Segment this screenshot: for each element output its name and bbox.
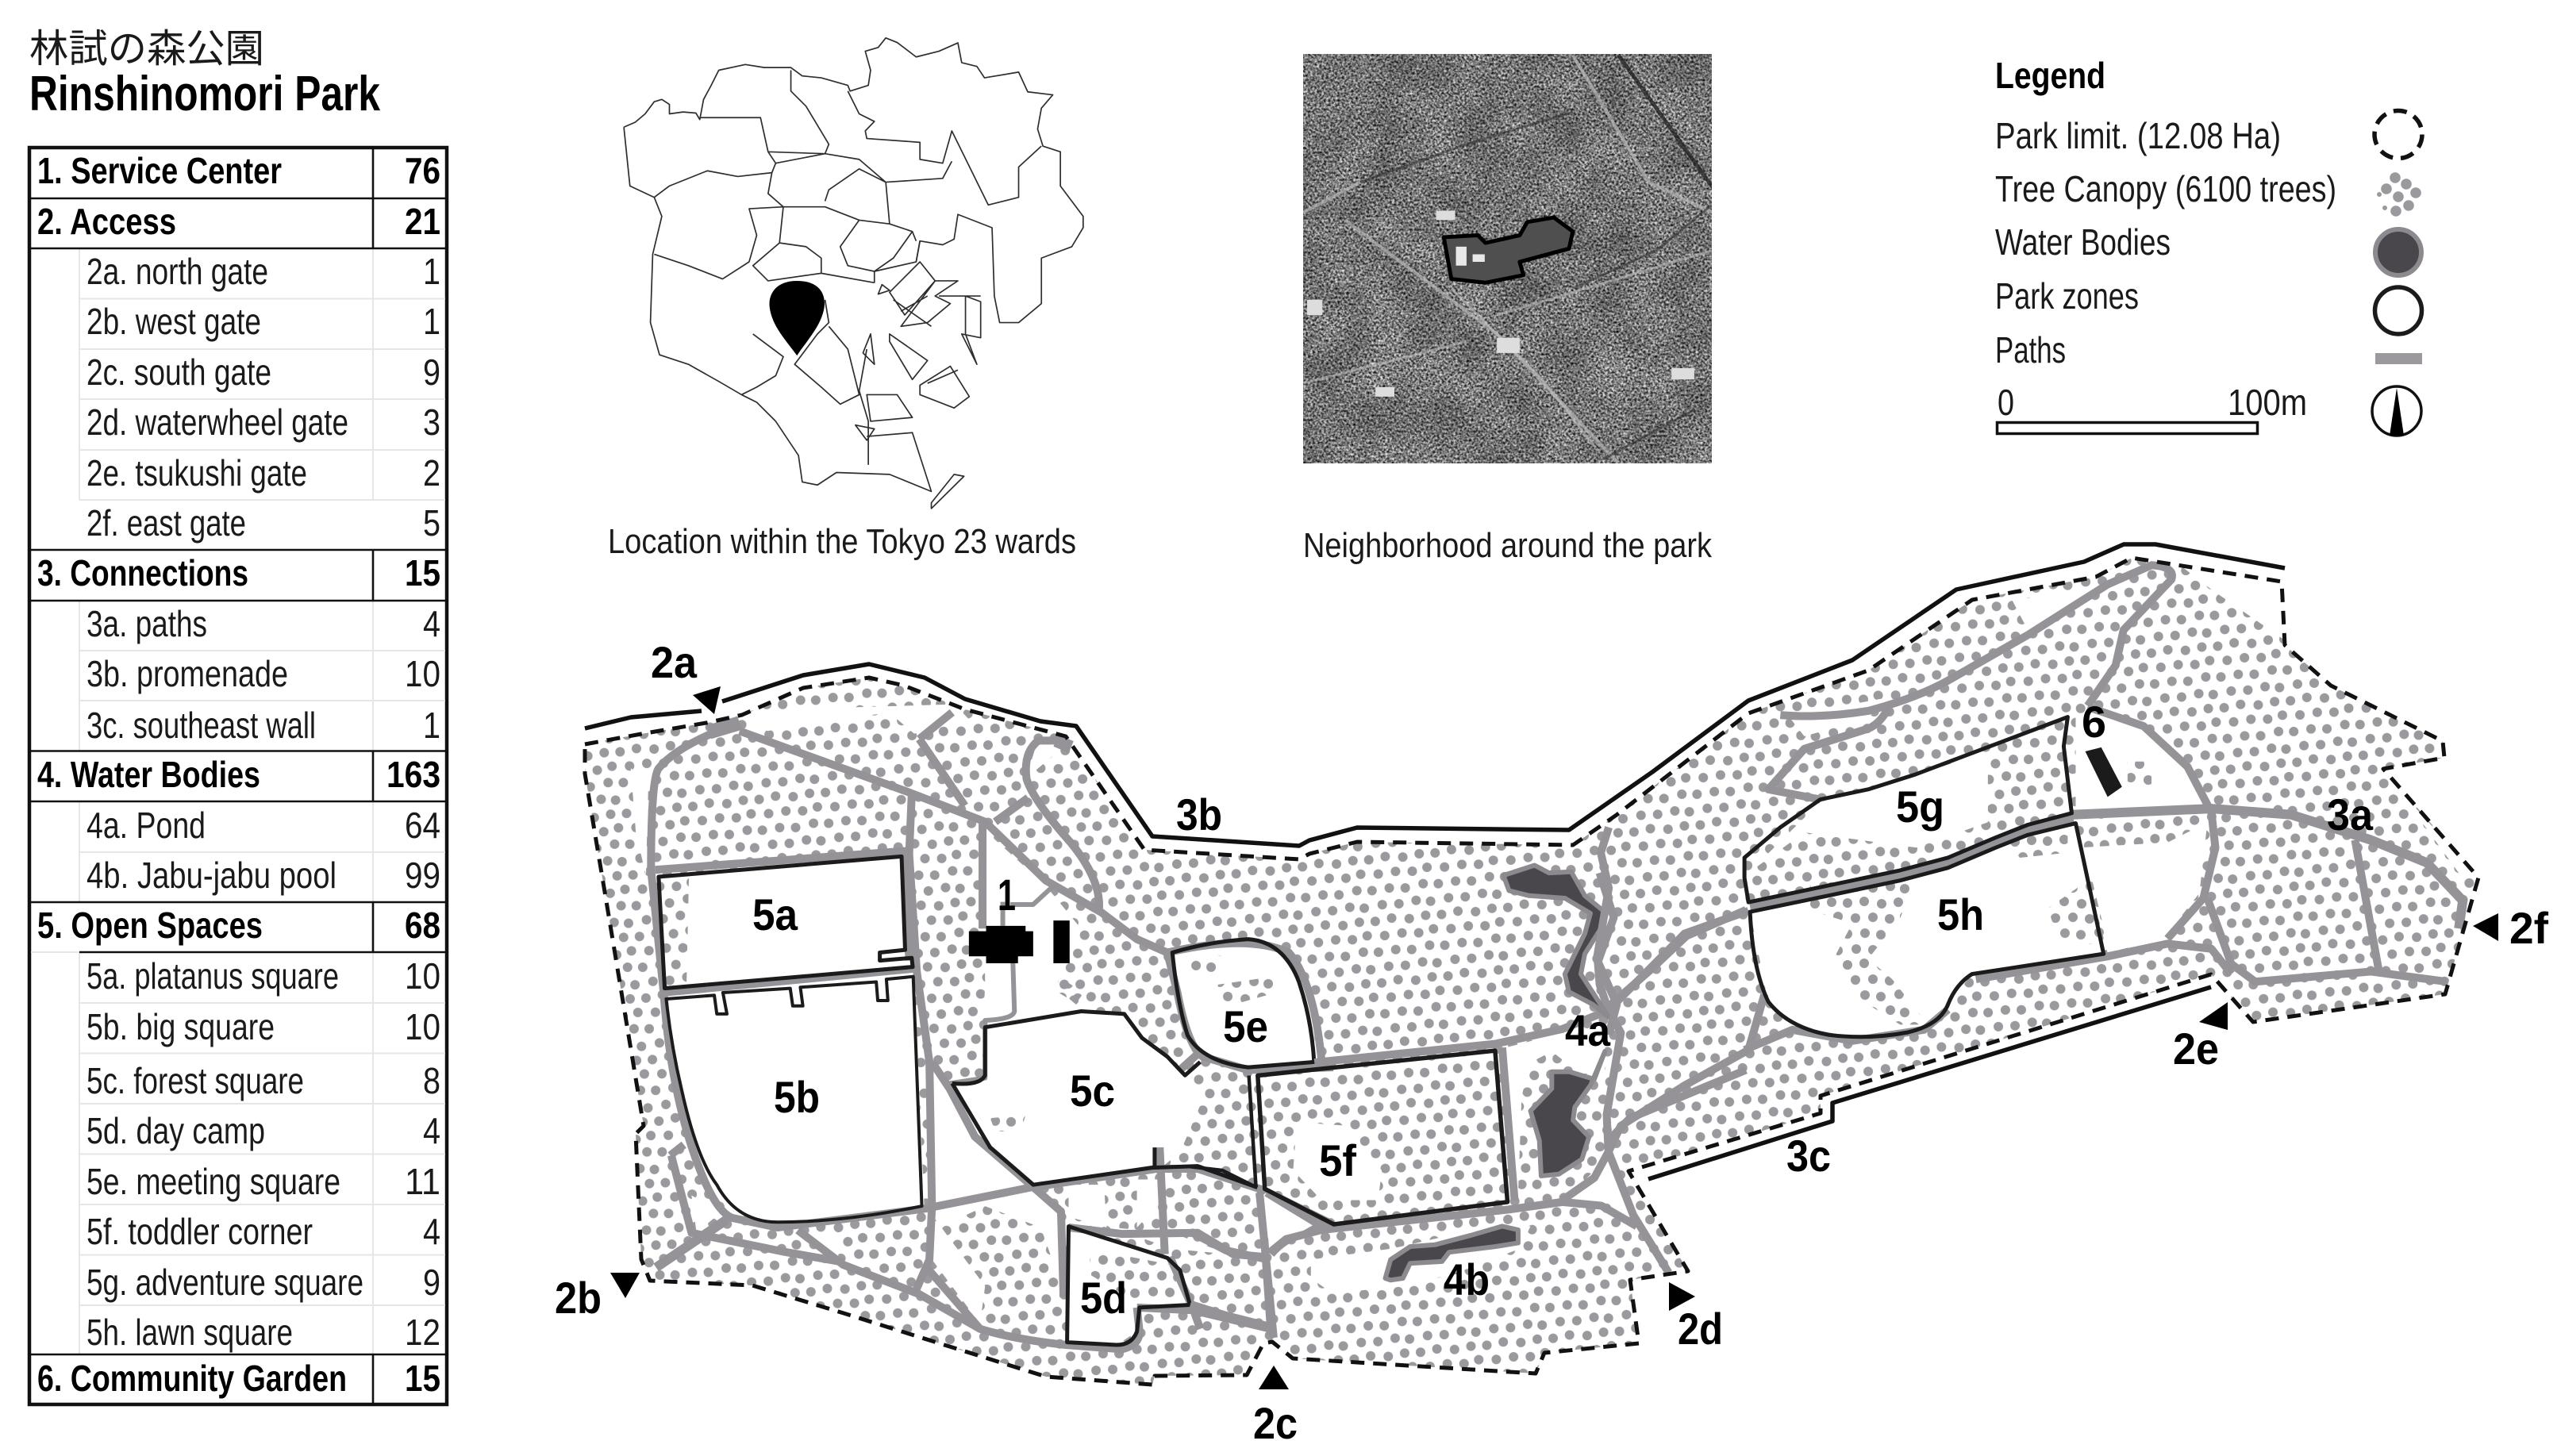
icon: service center buildings (969, 920, 1070, 963)
clearings east (1748, 562, 2478, 1037)
rows: open space types: 5d. day camp (87, 1110, 265, 1151)
row: community garden: 6. Community Garden (37, 1358, 347, 1399)
caption: neighborhood: Neighborhood around the park (1303, 526, 1713, 565)
central sector (1190, 873, 1746, 1338)
title: Japanese name: 林試の森公園 (29, 28, 264, 71)
rows: access gates: 2c. south gate (87, 352, 271, 393)
solid boundary southeast wall (1648, 987, 2211, 1179)
park map (555, 544, 2548, 1448)
pool 4b (1386, 1226, 1518, 1280)
tree canopy (585, 558, 2478, 1385)
rows: connection types: 3c. southeast wall (87, 705, 316, 746)
rows: connection types: 10 (405, 653, 440, 694)
marker 2c (1259, 1366, 1289, 1389)
clearings central (1254, 1033, 1633, 1293)
map labels: 4b (1444, 1254, 1490, 1304)
gate markers (610, 686, 2498, 1389)
rows: access gates: 2d. waterwheel gate (87, 401, 348, 443)
row: water bodies: 163 (386, 754, 440, 795)
row: connections: 3. Connections (37, 552, 248, 594)
row: water bodies: 4. Water Bodies (37, 754, 260, 795)
row: water bodies (37, 754, 440, 795)
rows: access gates: 2e. tsukushi gate (87, 452, 307, 494)
rows: connection types: 4 (423, 603, 440, 644)
map labels: 2c (1253, 1398, 1298, 1448)
zone 5f (1258, 1051, 1508, 1224)
rows: access gates: 2b. west gate (87, 301, 261, 342)
map labels: 5b (774, 1072, 820, 1122)
marker 2e (2199, 1002, 2228, 1030)
legend item: paths: Paths (1995, 329, 2066, 371)
rows: open space types: 5g. adventure square (87, 1262, 363, 1303)
scale bar: 100m (2228, 382, 2307, 423)
rows: water body types: 99 (405, 855, 440, 896)
rows: open space types: 5h. lawn square (87, 1312, 293, 1353)
rows: access gates: 5 (423, 502, 440, 544)
park limit dashed (585, 558, 2478, 1385)
scale bar (1997, 382, 2307, 433)
rows: open space types: 10 (405, 1006, 440, 1047)
row: connections (37, 552, 440, 594)
map labels: 4a (1565, 1005, 1611, 1055)
rows: access gates: 2a. north gate (87, 251, 268, 292)
map labels: 3c (1786, 1131, 1831, 1181)
rows: open space types: 11 (405, 1161, 440, 1202)
rows: open space types (87, 955, 440, 1353)
map labels: 2d (1678, 1304, 1723, 1354)
rows: access gates: 3 (423, 401, 440, 443)
map labels: 1 (998, 870, 1016, 920)
rows: connection types: 3b. promenade (87, 653, 288, 694)
rows: connection types: 1 (423, 705, 440, 746)
legend item: park zones: Park zones (1995, 275, 2139, 317)
rows: open space types: 5a. platanus square (87, 955, 339, 997)
row: service center: 76 (405, 150, 440, 191)
map labels (555, 637, 2548, 1448)
map labels: 5a (752, 889, 798, 939)
caption: location: Location within the Tokyo 23 wards (608, 522, 1076, 561)
map labels: 5f (1319, 1135, 1356, 1185)
map labels: 3a (2327, 789, 2374, 839)
row: access (37, 201, 440, 242)
icon: community garden building (2086, 747, 2122, 797)
legend item: park zones (1995, 275, 2422, 334)
legend item: park limit (1995, 111, 2422, 159)
map labels: 2a (651, 637, 698, 687)
marker 2a (693, 686, 721, 714)
rows: open space types: 5e. meeting square (87, 1161, 340, 1202)
paths central (1190, 873, 1746, 1338)
paths west (651, 713, 1333, 1349)
legend heading: Legend (1995, 55, 2105, 96)
row: connections: 15 (405, 552, 440, 594)
clearings west (631, 705, 1317, 1345)
rows: access gates: 1 (423, 301, 440, 342)
map labels: 5e (1223, 1001, 1268, 1051)
park zones east (1744, 717, 2104, 1037)
row: service center: 1. Service Center (37, 150, 282, 191)
map labels: 2e (2173, 1024, 2219, 1074)
park outline on aerial (1444, 217, 1573, 282)
rows: open space types: 4 (423, 1110, 440, 1151)
marker 2f (2473, 913, 2498, 941)
rows: open space types: 4 (423, 1211, 440, 1252)
row: access: 21 (405, 201, 440, 242)
marker 2b (610, 1273, 640, 1298)
scale bar: 0 (1998, 382, 2014, 423)
table: visitor counts by park feature (29, 148, 447, 1404)
rows: connection types: 3a. paths (87, 603, 207, 644)
row: access: 2. Access (37, 201, 176, 242)
legend item: tree canopy: Tree Canopy (6100 trees) (1995, 168, 2336, 209)
rows: open space types: 12 (405, 1312, 440, 1353)
legend item: water bodies (1995, 221, 2421, 275)
rows: access gates: 1 (423, 251, 440, 292)
rows: connection types (87, 603, 440, 746)
map labels: 5d (1080, 1273, 1127, 1323)
zone divider (1190, 1075, 1256, 1187)
map labels: 5h (1937, 889, 1984, 939)
west sector (631, 705, 1333, 1349)
rows: access gates (87, 251, 440, 544)
rows: open space types: 5f. toddler corner (87, 1211, 313, 1252)
rows: access gates: 2f. east gate (87, 502, 246, 544)
row: community garden: 15 (405, 1358, 440, 1399)
rows: water body types (87, 805, 440, 896)
rows: open space types: 9 (423, 1262, 440, 1303)
title: English name: Rinshinomori Park (29, 67, 380, 121)
east sector (1503, 562, 2478, 1151)
legend item: paths (1995, 329, 2422, 371)
legend (1995, 55, 2422, 436)
rows: water body types: 4a. Pond (87, 805, 206, 846)
rows: water body types: 64 (405, 805, 440, 846)
paths east (1597, 565, 2463, 1151)
map labels: 5c (1070, 1066, 1115, 1116)
row: open spaces: 5. Open Spaces (37, 905, 263, 946)
row: open spaces: 68 (405, 905, 440, 946)
icon: location pin (769, 281, 825, 355)
north arrow (2372, 386, 2421, 436)
legend item: water bodies: Water Bodies (1995, 221, 2171, 263)
rows: open space types: 5c. forest square (87, 1060, 304, 1101)
aerial image: neighborhood (1303, 54, 1717, 463)
map labels: 2f (2509, 903, 2548, 953)
title (29, 28, 380, 121)
map: Tokyo 23 wards location (624, 38, 1083, 509)
marker 2d (1669, 1282, 1695, 1311)
rows: open space types: 8 (423, 1060, 440, 1101)
rows: access gates: 9 (423, 352, 440, 393)
pond 4a lower (1531, 1051, 1605, 1176)
legend item: park limit: Park limit. (12.08 Ha) (1995, 115, 2281, 156)
map labels: 3b (1176, 789, 1222, 839)
pond 4a upper (1503, 866, 1609, 1017)
rows: access gates: 2 (423, 452, 440, 494)
solid boundary north (promenade) (585, 544, 2285, 846)
map labels: 2b (555, 1273, 602, 1323)
rows: water body types: 4b. Jabu-jabu pool (87, 855, 336, 896)
rows: open space types: 5b. big square (87, 1006, 275, 1047)
row: open spaces (37, 905, 440, 946)
rows: open space types: 10 (405, 955, 440, 997)
park zones west (659, 856, 1314, 1345)
map labels: 5g (1896, 782, 1944, 832)
map labels: 6 (2082, 697, 2106, 747)
